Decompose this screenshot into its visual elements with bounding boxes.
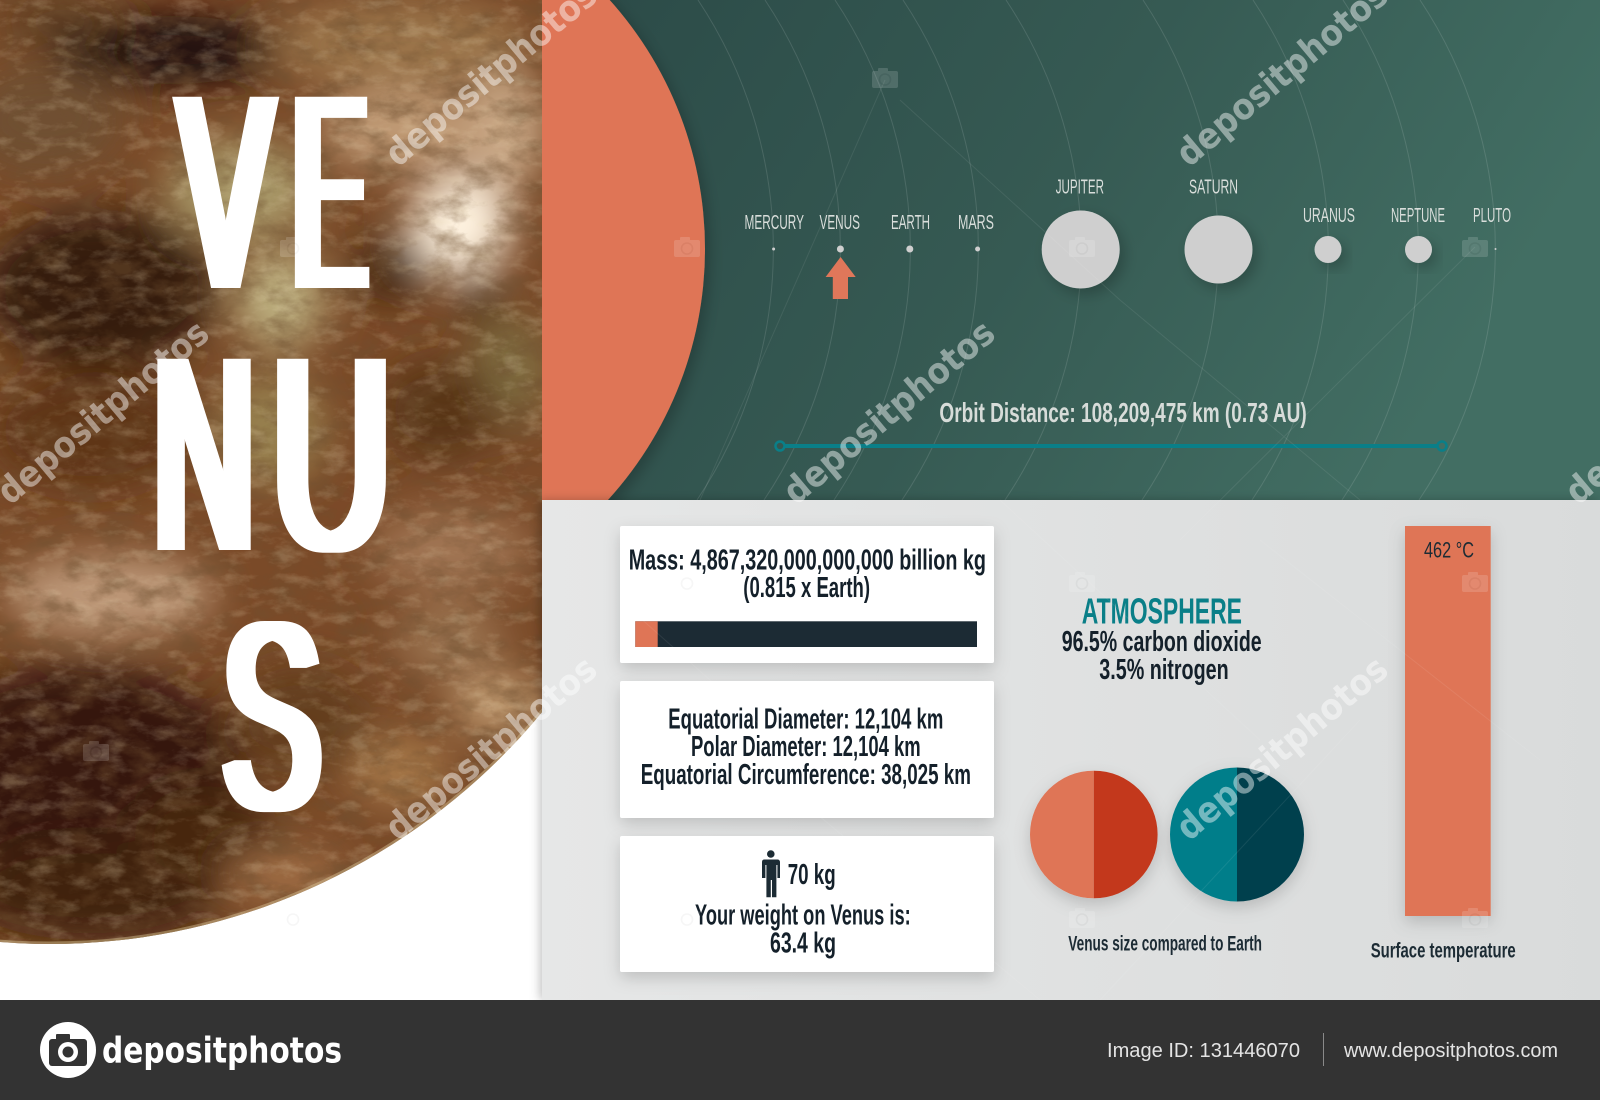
panel: solar system band (542, 0, 1600, 500)
arrow marking Venus (826, 257, 856, 299)
coral planet disc (542, 0, 710, 500)
card: diameters (620, 681, 994, 818)
watermark: depositphotos text: depositphotos (1168, 648, 1396, 849)
Jupiter: JUPITER (1056, 176, 1104, 198)
Neptune (1391, 205, 1445, 263)
Earth (891, 212, 930, 252)
watermark: camera icons (83, 68, 1488, 928)
watermark: depositphotos text: depositphotos (775, 312, 1003, 513)
planet photo: Venus surface (0, 0, 542, 944)
atmosphere composition (1062, 626, 1262, 686)
icon: person (762, 850, 780, 897)
footer bar (0, 1000, 1600, 1100)
title: VENUS: S (223, 566, 320, 868)
atmosphere composition: 96.5% carbon dioxide (1062, 626, 1262, 658)
weight text (695, 859, 911, 960)
Venus disc (1030, 771, 1158, 898)
Neptune: NEPTUNE (1391, 205, 1445, 227)
title: VENUS: E (294, 36, 366, 347)
caption: size comparison: Venus size compared to Earth (1068, 933, 1262, 956)
card: mass (620, 526, 994, 663)
watermark: depositphotos text (0, 0, 1600, 849)
mass text: (0.815 x Earth) (743, 572, 870, 604)
heading: atmosphere: ATMOSPHERE (1082, 590, 1242, 632)
panel: data area (542, 500, 1600, 1000)
logo: depositphotos (40, 1022, 342, 1078)
chart: surface temperature (1371, 526, 1516, 962)
Uranus: URANUS (1303, 205, 1355, 227)
Saturn: SATURN (1189, 176, 1238, 198)
Jupiter (1042, 176, 1120, 288)
card: weight (620, 836, 994, 972)
diameter text: Equatorial Diameter: 12,104 km (668, 704, 943, 736)
planet row (744, 176, 1511, 288)
caption: temperature: Surface temperature (1371, 939, 1516, 962)
Venus (820, 212, 860, 252)
title: VENUS: U (272, 298, 390, 609)
title: VENUS (154, 36, 390, 868)
temperature bar (1405, 526, 1491, 916)
atmosphere block (1062, 590, 1262, 686)
title: VENUS: V (180, 36, 273, 347)
title: VENUS: N (154, 298, 254, 609)
website: www.depositphotos.com (1343, 1040, 1558, 1062)
Venus: VENUS (820, 212, 860, 234)
diameter text: Polar Diameter: 12,104 km (691, 731, 921, 763)
image id: Image ID: 131446070 (1107, 1040, 1300, 1062)
Earth: EARTH (891, 212, 930, 234)
Saturn (1184, 176, 1252, 284)
chart: size comparison (1030, 768, 1304, 956)
mass bar (635, 621, 977, 647)
temperature value: 462 °C (1424, 538, 1474, 562)
Earth disc (1170, 768, 1304, 902)
Uranus (1303, 205, 1355, 263)
Mars: MARS (958, 212, 994, 234)
Pluto (1473, 205, 1511, 250)
mass text: Mass: 4,867,320,000,000,000 billion kg (629, 544, 986, 576)
Pluto: PLUTO (1473, 205, 1511, 227)
atmosphere composition: 3.5% nitrogen (1099, 654, 1229, 686)
panel: white background behind planet (0, 0, 542, 1000)
orbit distance scale line (776, 442, 1446, 450)
weight text: 70 kg (788, 859, 836, 891)
mass text (629, 544, 986, 604)
logo: depositphotos: depositphotos (102, 1030, 342, 1072)
Mercury: MERCURY (744, 212, 804, 234)
weight text: 63.4 kg (770, 928, 836, 960)
footer divider (1323, 1033, 1324, 1066)
orbit distance label: Orbit Distance: 108,209,475 km (0.73 AU) (939, 397, 1307, 428)
Mars (958, 212, 994, 252)
Mercury (744, 212, 804, 250)
diameter text: Equatorial Circumference: 38,025 km (641, 759, 971, 791)
watermark: depositphotos text: depositphotos (377, 648, 605, 849)
diameter text (641, 704, 971, 791)
orbit lines (697, 0, 1495, 500)
weight text: Your weight on Venus is: (695, 900, 911, 932)
